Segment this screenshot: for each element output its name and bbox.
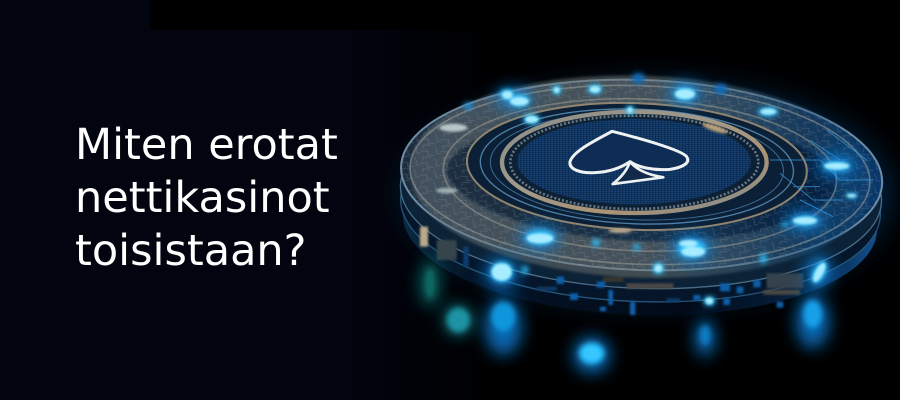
soft glow behind lights [420, 83, 857, 373]
icon: spade [570, 131, 688, 184]
title: nettikasinot [75, 173, 330, 223]
title: toisistaan? [75, 226, 307, 276]
side wall circuit details [420, 227, 803, 315]
title [75, 120, 338, 276]
bright light cores [436, 86, 857, 359]
glowing lights on chip [425, 73, 858, 364]
chip side wall [396, 90, 885, 323]
right side circuit traces [770, 130, 873, 217]
centre medallion with gold ring [502, 112, 767, 213]
title: Miten erotat [75, 120, 338, 170]
chip top face with circuit rings [398, 72, 885, 278]
ambient blue glow [408, 87, 888, 300]
